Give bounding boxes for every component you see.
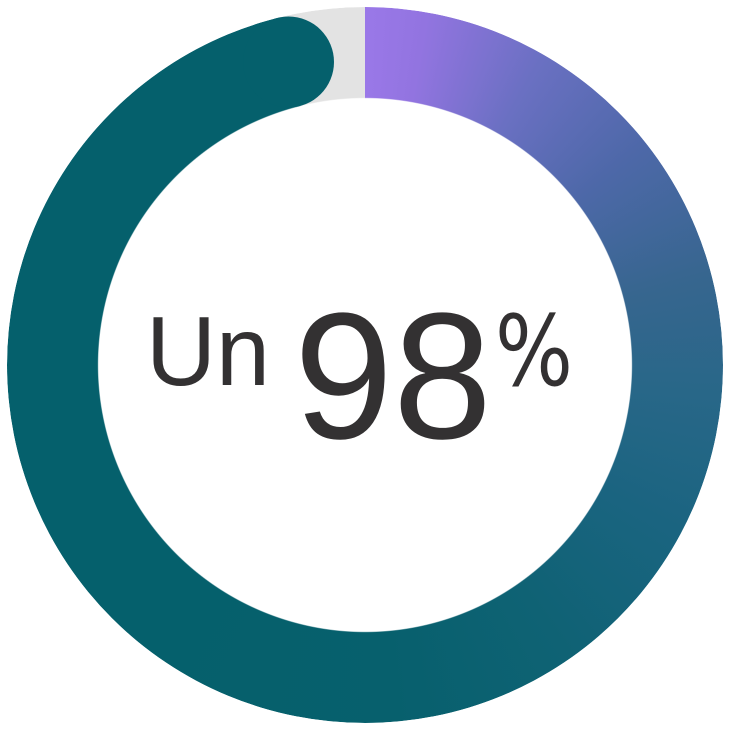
rounded end cap of ring bbox=[243, 16, 334, 108]
text: 98: 98 bbox=[294, 276, 492, 477]
text: Un: Un bbox=[146, 296, 270, 406]
text: percent sign: % bbox=[495, 295, 573, 409]
